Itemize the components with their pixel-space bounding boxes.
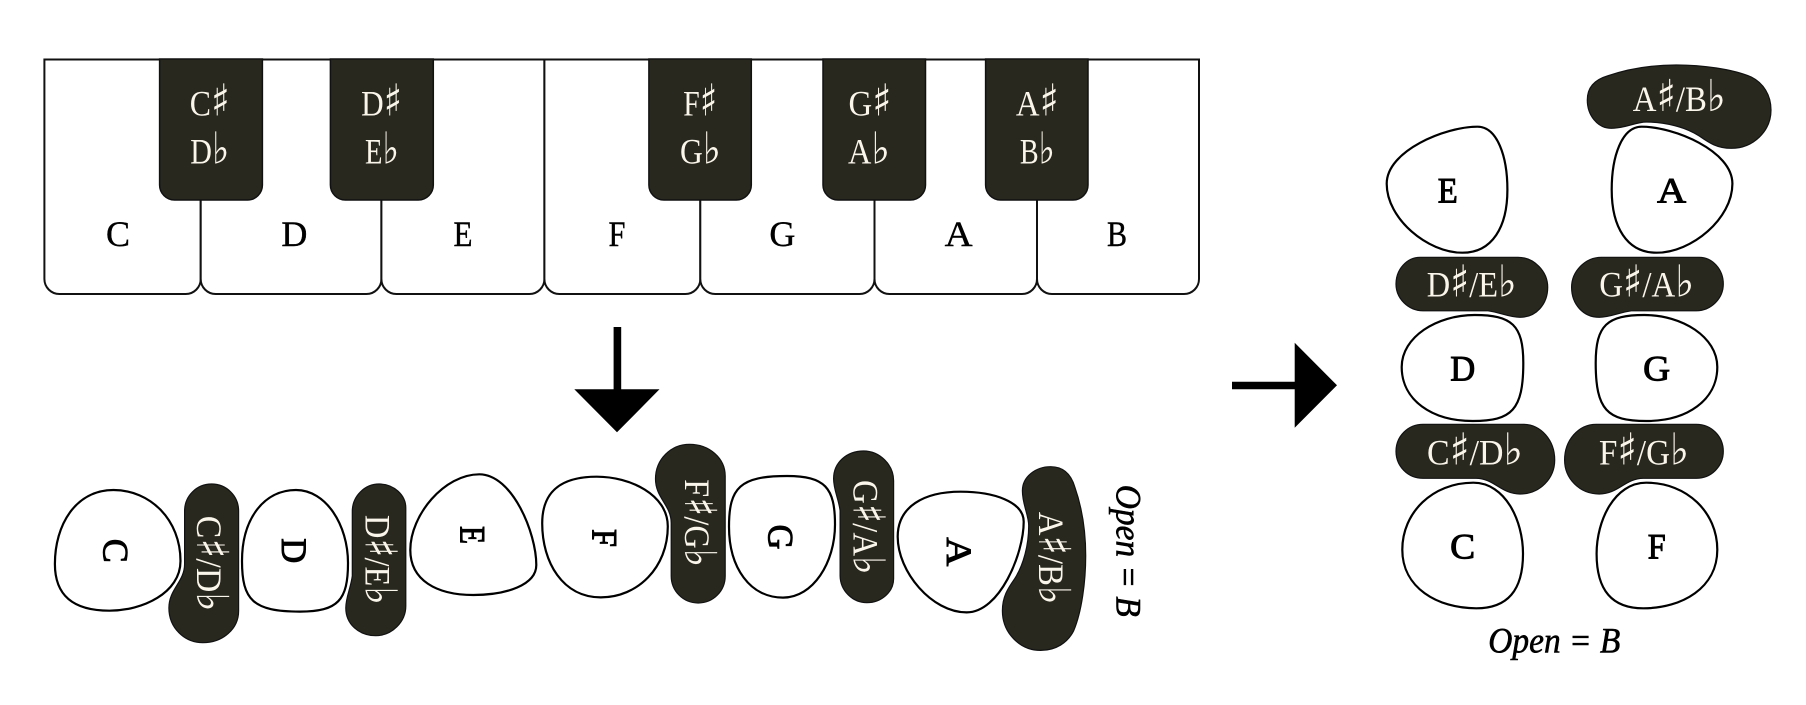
black key F sharp / G flat: F♯ — [683, 76, 717, 127]
white key A — [874, 60, 1037, 294]
hole G — [729, 476, 835, 598]
black key A sharp / B flat: A♯ — [1016, 76, 1059, 127]
hole F — [1597, 483, 1717, 608]
white key E: E — [454, 214, 472, 254]
black key D sharp / E flat — [330, 59, 433, 200]
arrow: down — [574, 327, 660, 432]
white key B: B — [1107, 214, 1127, 254]
key A sharp / B flat: A♯ /B♭ — [1028, 512, 1079, 605]
white key A: A — [945, 214, 973, 254]
black key G sharp / A flat — [823, 59, 926, 200]
hole A: A — [1657, 171, 1686, 211]
hole E: E — [1438, 171, 1458, 211]
hole G: G — [1643, 349, 1670, 389]
black key C sharp / D flat: C♯ — [190, 76, 230, 127]
key G sharp / A flat: G♯/A♭ — [1599, 257, 1694, 308]
key A sharp / B flat: A♯/B♭ — [1633, 71, 1726, 122]
key C sharp / D flat — [169, 484, 239, 643]
key A sharp / B flat — [1587, 65, 1771, 148]
black key D sharp / E flat: D♯ — [361, 76, 402, 127]
hole A — [1612, 127, 1732, 253]
black key F sharp / G flat — [649, 59, 751, 200]
black key C sharp / D flat: D♭ — [190, 123, 229, 174]
hole D — [1402, 315, 1523, 421]
white key D — [201, 60, 381, 294]
key D sharp / E flat — [346, 484, 406, 636]
vertical flute key layout — [1387, 65, 1771, 661]
key C sharp / D flat — [1396, 424, 1555, 494]
key F sharp / G flat: F♯/G♭ — [674, 479, 725, 567]
hole C — [1402, 483, 1523, 608]
hole A: A — [939, 537, 979, 566]
key F sharp / G flat — [1565, 424, 1723, 494]
piano keyboard — [44, 59, 1199, 294]
note: open = B: Open = B — [1488, 621, 1620, 661]
white key C: C — [106, 214, 130, 254]
hole G — [1596, 315, 1717, 421]
hole A — [898, 492, 1024, 612]
key D sharp / E flat: D♯/E♭ — [355, 515, 406, 605]
black key G sharp / A flat: G♯ — [848, 76, 892, 127]
arrow: right — [1232, 343, 1337, 428]
note: open = B, rotated: Open = B — [1109, 485, 1149, 617]
hole G: G — [760, 524, 800, 550]
black key A sharp / B flat — [986, 59, 1088, 200]
white key F — [544, 60, 700, 294]
black key G sharp / A flat: A♭ — [848, 123, 890, 174]
key D sharp / E flat — [1396, 257, 1548, 317]
key F sharp / G flat: F♯/G♭ — [1599, 424, 1689, 475]
hole F: F — [1648, 526, 1666, 566]
key F sharp / G flat — [656, 444, 725, 603]
hole D: D — [274, 538, 314, 563]
white key G: G — [769, 214, 795, 254]
white key E — [381, 60, 544, 294]
white key F: F — [608, 214, 626, 254]
white key D: D — [281, 214, 307, 254]
horizontal flute key layout — [55, 444, 1149, 650]
key G sharp / A flat — [1572, 257, 1723, 317]
hole C: C — [96, 539, 136, 563]
white key B — [1037, 60, 1199, 294]
hole F — [542, 477, 668, 597]
white key C — [44, 60, 201, 294]
key G sharp / A flat — [834, 451, 894, 603]
hole F: F — [585, 529, 625, 547]
key C sharp / D flat: C ♯ /D♭ — [186, 516, 237, 612]
key A sharp / B flat — [1002, 467, 1086, 650]
hole E — [410, 474, 536, 595]
black key F sharp / G flat: G♭ — [680, 123, 721, 174]
key D sharp / E flat: D♯/E♭ — [1427, 257, 1517, 308]
black key A sharp / B flat: B♭ — [1020, 123, 1055, 174]
hole C — [55, 490, 180, 611]
hole E — [1387, 127, 1507, 253]
key G sharp / A flat: G♯ /A♭ — [842, 480, 893, 575]
black key D sharp / E flat: E♭ — [365, 123, 399, 174]
white key G — [700, 60, 874, 294]
hole D — [242, 490, 348, 612]
black key C sharp / D flat — [160, 59, 262, 200]
key C sharp / D flat: C♯/D♭ — [1427, 424, 1523, 475]
hole D: D — [1450, 349, 1475, 389]
hole C: C — [1450, 526, 1475, 566]
hole E: E — [452, 526, 492, 544]
